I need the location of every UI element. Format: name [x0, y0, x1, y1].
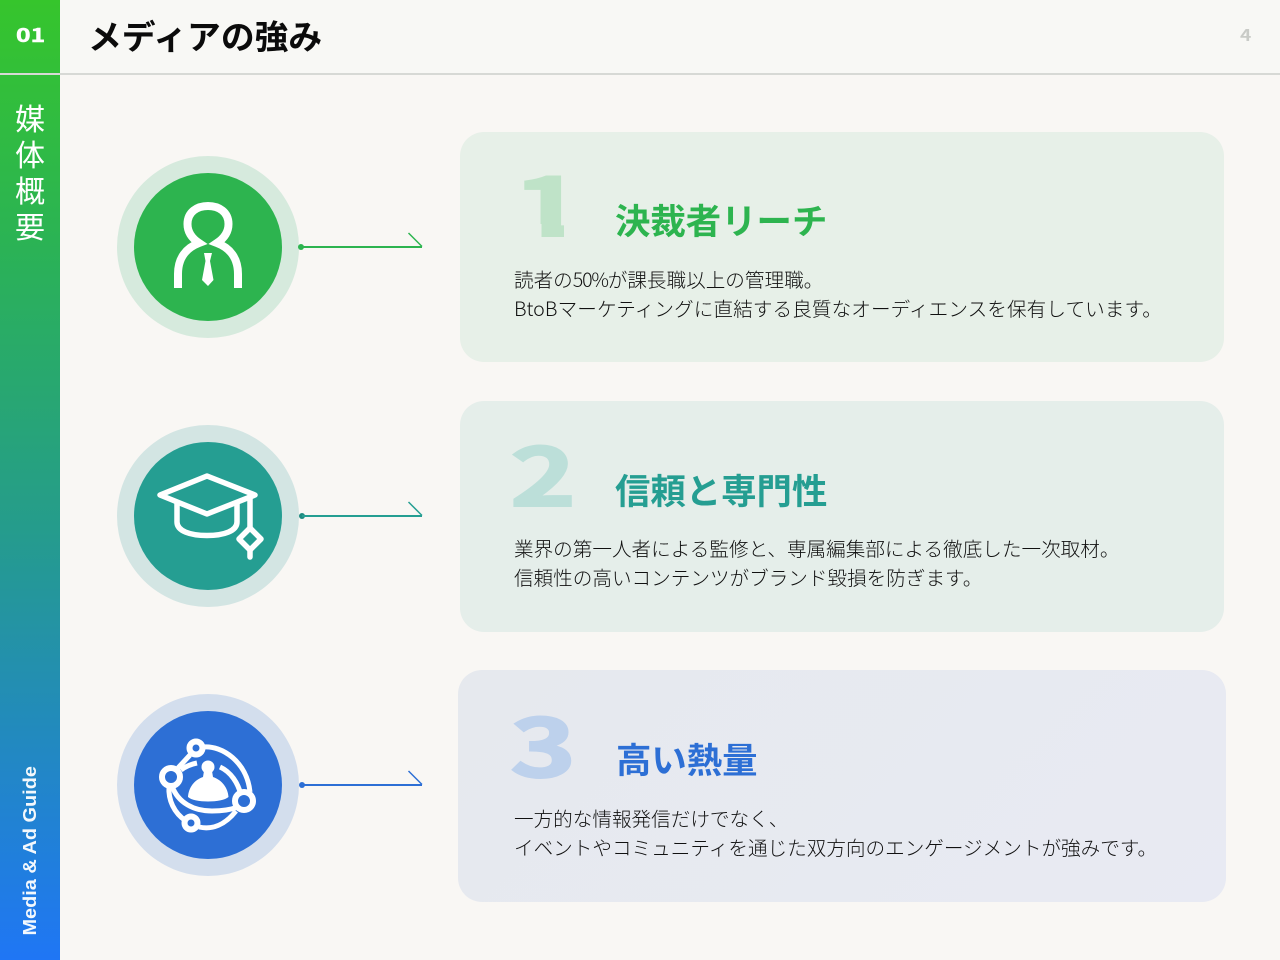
title: メディアの強み	[88, 10, 322, 59]
section label: 体	[15, 131, 45, 175]
body text 1	[514, 264, 1162, 322]
body text 3	[514, 803, 1157, 861]
body text 3: イベントやコミュニティを通じた双方向のエンゲージメントが強みです。	[514, 832, 1157, 861]
arrow 2	[299, 502, 422, 519]
body text 2	[514, 533, 1119, 591]
section label: 要	[15, 203, 45, 247]
body text 2: 業界の第一人者による監修と、専属編集部による徹底した一次取材。	[514, 533, 1119, 562]
icon: community network	[117, 694, 299, 876]
sidebar	[0, 0, 60, 960]
icon: graduation cap	[117, 425, 299, 607]
body text 1: 読者の50%が課長職以上の管理職。	[514, 264, 823, 293]
icon: decision maker	[117, 156, 299, 338]
sidebar caption: Media & Ad Guide	[19, 766, 40, 936]
panel: decision-maker reach	[460, 132, 1224, 362]
section label: 媒	[15, 95, 45, 139]
panel: high engagement	[458, 670, 1226, 902]
body text 1: BtoBマーケティングに直結する良質なオーディエンスを保有しています。	[514, 293, 1162, 322]
number 2: 2	[510, 414, 576, 530]
section label: 概	[15, 167, 45, 211]
header divider	[0, 73, 1280, 75]
heading 1: 決裁者リーチ	[615, 194, 827, 245]
number 3: 3	[510, 685, 576, 801]
arrow 3	[299, 770, 422, 788]
body text 2: 信頼性の高いコンテンツがブランド毀損を防ぎます。	[514, 562, 982, 591]
body text 3: 一方的な情報発信だけでなく、	[514, 803, 788, 832]
section number: 01	[16, 21, 45, 48]
panel: trust and expertise	[460, 401, 1224, 632]
page number: 4	[1240, 22, 1251, 46]
section label	[15, 95, 45, 247]
arrow 1	[298, 232, 422, 250]
header background	[60, 0, 1280, 73]
number 1: 1	[513, 144, 584, 260]
heading 2: 信頼と専門性	[615, 464, 827, 515]
heading 3: 高い熱量	[616, 733, 758, 784]
